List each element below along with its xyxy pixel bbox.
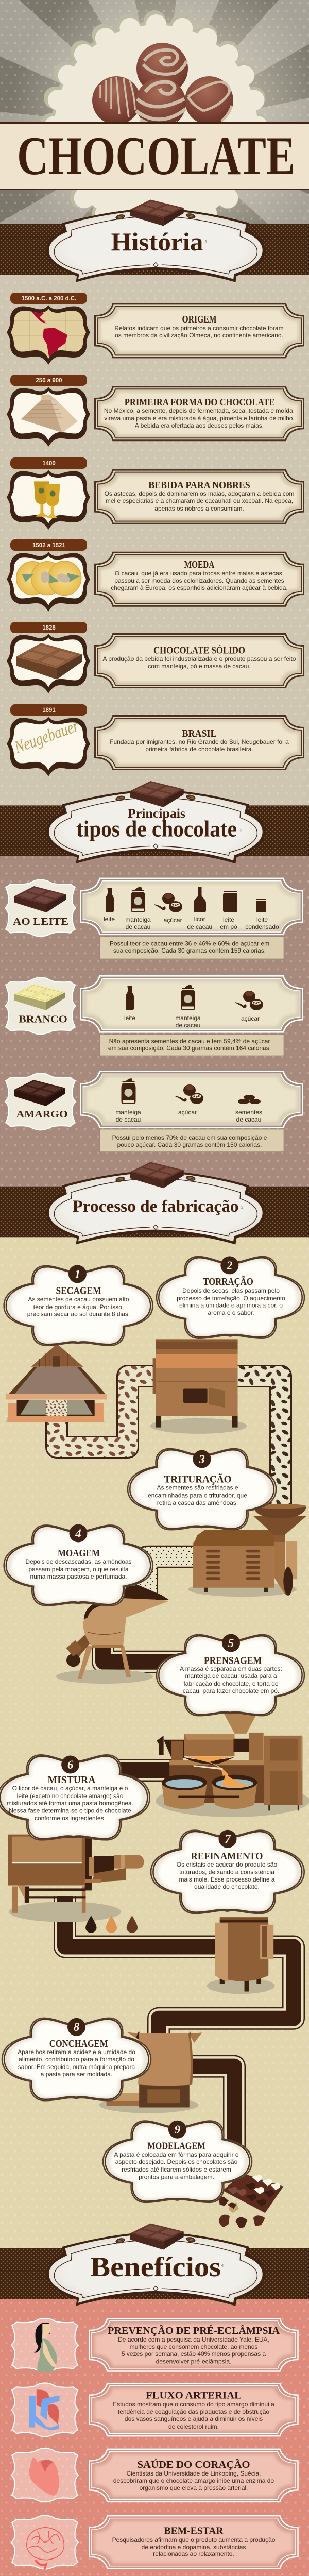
- timeline row: brasil: Neugebauer: [11, 716, 81, 757]
- step 2: torração: TORRAÇÃO: [203, 1276, 253, 1287]
- type: ao leite: de cacau: [126, 923, 150, 930]
- timeline row: bebida para nobres: [7, 457, 304, 530]
- timeline row: moeda: [7, 539, 304, 612]
- step 8: conchagem: a pasta para ser moldada.: [41, 2071, 112, 2078]
- step 4: moagem: Depois de descascadas, as amêndoas: [25, 1558, 132, 1565]
- machine: crusher: [188, 1504, 306, 1597]
- type: branco: manteiga: [175, 1014, 201, 1022]
- timeline row: moeda: chegaram à Europa, os espanhóis adicionaram açúcar à bebida.: [111, 584, 288, 591]
- type: ao leite: [5, 878, 302, 959]
- step 5: prensagem: PRENSAGEM: [204, 1655, 262, 1666]
- paste drops: [85, 1916, 138, 1933]
- step 6: mistura: misturados até formar uma pasta homogênea.: [7, 1800, 133, 1807]
- timeline row: primeira forma: [7, 375, 304, 447]
- step 8: conchagem: sabor. Em seguida, outra máquina prepara: [18, 2063, 135, 2071]
- pipe: dried beans to roaster: [57, 1376, 157, 1447]
- heading: Benefícios: Benefícios: [90, 2251, 221, 2282]
- step 5: prensagem: manteiga de cacau, usada para a: [185, 1672, 277, 1680]
- pipe: mixer to refiner to conching: [65, 1896, 294, 2045]
- section background: history: [0, 275, 309, 806]
- machine: mixer: [8, 1835, 144, 1922]
- heading: Principais tipos de chocolate: [0, 781, 309, 863]
- timeline row: brasil: Fundada por imigrantes, no Rio Grande do Sul, Neugebauer foi a: [110, 738, 289, 745]
- benefit: bem-estar: de endorfina e dopamina, substâncias: [142, 2544, 246, 2551]
- type: branco: açúcar: [241, 1015, 260, 1022]
- timeline row: bebida para nobres: apenas os nobres a consumiam.: [154, 505, 244, 512]
- panel: types of chocolate: [5, 878, 302, 1152]
- step 7: refinamento: REFINAMENTO: [191, 1851, 263, 1862]
- step 9: modelagem: resfriados até ficarem sólidos e estarem: [122, 2166, 231, 2173]
- step 7: refinamento: triturados, deixando a consistência: [179, 1869, 274, 1876]
- step 7: refinamento: qualidade do chocolate.: [194, 1883, 260, 1890]
- timeline row: bebida para nobres: Os astecas, depois de dominarem os maias, adoçaram a bebida com: [105, 490, 294, 497]
- hero background: [0, 0, 309, 224]
- timeline row: bebida para nobres: BEBIDA PARA NOBRES: [148, 480, 250, 491]
- step 6: mistura: conforme os ingredientes.: [35, 1815, 106, 1822]
- machine: mill: [56, 1585, 169, 1684]
- step 5: prensagem: fabricação do chocolate, e torta de: [183, 1680, 279, 1687]
- benefit: pré-eclâmpsia: PREVENÇÃO DE PRÉ-ECLÂMPSIA: [108, 2324, 280, 2336]
- type: ao leite: leite: [104, 916, 115, 923]
- heading: Principais tipos de chocolate: 2: [240, 828, 243, 833]
- benefit: saúde do coração: organismo que eleva a pressão arterial.: [140, 2484, 248, 2492]
- step 1: secagem: [4, 1265, 153, 1346]
- heading: Processo de fabricação: [0, 1162, 309, 1244]
- step 3: trituração: As sementes são resfriadas e: [157, 1484, 238, 1492]
- timeline row: primeira forma: No México, a semente, depois de fermentada, seca, tostada e moída,: [104, 407, 295, 414]
- benefit: pré-eclâmpsia: [11, 2318, 298, 2372]
- step 2: torração: 2: [226, 1259, 233, 1272]
- section background: types: [0, 856, 309, 1187]
- timeline row: origem: 1500 a.C. a 200 d.C.: [22, 296, 76, 302]
- benefit: fluxo arterial: de colesterol ruim.: [168, 2423, 219, 2430]
- timeline row: brasil: BRASIL: [182, 728, 216, 739]
- heading: Processo de fabricação: Processo de fabricação: [72, 1197, 239, 1216]
- step 9: modelagem: aspecto desejado. Depois os chocolates são: [115, 2158, 238, 2165]
- type: ao leite: sua composição. Cada 30 gramas contém 159 calorias.: [113, 947, 266, 954]
- section background: process: [0, 1237, 309, 2248]
- timeline row: brasil: primeira fábrica de chocolate brasileira.: [145, 745, 253, 753]
- step 1: secagem: teor de gordura e água. Por isso,: [33, 1303, 124, 1311]
- step 4: moagem: numa massa pastosa e perfumada.: [30, 1573, 127, 1580]
- timeline row: moeda: MOEDA: [184, 559, 215, 570]
- benefit: saúde do coração: [11, 2448, 298, 2502]
- type: branco: em sua composição. Cada 30 gramas contém 164 calorias.: [108, 1045, 271, 1052]
- type: branco: [5, 976, 302, 1056]
- benefit: fluxo arterial: FLUXO ARTERIAL: [146, 2389, 242, 2401]
- pipe: paste mill to press: [103, 1643, 206, 1662]
- pipe: conching to molding: [191, 2066, 234, 2148]
- type: branco: Não apresenta sementes de cacau e tem 59,4% de açúcar: [109, 1038, 270, 1045]
- benefit: fluxo arterial: dos vasos sanguíneos e ajuda a diminuir os níveis: [125, 2415, 263, 2422]
- timeline row: moeda: 1502 a 1521: [32, 543, 66, 549]
- panel: manufacturing process: [0, 1256, 309, 2228]
- type: amargo: AMARGO: [16, 1109, 68, 1120]
- step 6: mistura: O licor de cacau, o açúcar, a manteiga e o: [12, 1785, 128, 1792]
- timeline row: primeira forma: virava uma pasta e era misturada à água, pimenta e farinha de milho.: [104, 415, 295, 422]
- step 8: conchagem: [2, 2018, 151, 2100]
- type: amargo: [5, 1072, 302, 1152]
- step 8: conchagem: 8: [74, 2021, 80, 2033]
- benefit: pré-eclâmpsia: desenvolver pré-eclâmpsia.: [156, 2358, 231, 2365]
- step 9: modelagem: A pasta é colocada em fôrmas para adquirir o: [114, 2151, 239, 2158]
- step 4: moagem: passam pela moagem, o que resulta: [28, 1566, 129, 1573]
- truffle front: [135, 78, 186, 128]
- heading: Processo de fabricação: 3: [241, 1205, 244, 1210]
- step 5: prensagem: [157, 1634, 304, 1716]
- type: ao leite: licor: [194, 916, 205, 923]
- step 6: mistura: leite (exceto no chocolate amargo) são: [17, 1792, 124, 1800]
- step 2: torração: Depois de secas, elas passam pelo: [182, 1287, 280, 1294]
- panel: benefits: [11, 2318, 298, 2576]
- timeline row: bebida para nobres: mel e especiarias e a chamaram de cacauhatl ou xocoatl. Na época,: [106, 497, 293, 504]
- molds and chocolates: [219, 2173, 283, 2228]
- benefit: bem-estar: BEM-ESTAR: [164, 2526, 224, 2537]
- step 4: moagem: MOAGEM: [58, 1548, 100, 1559]
- step 5: prensagem: A massa é separada em duas partes:: [180, 1665, 282, 1672]
- benefit: bem-estar: Pesquisadores afirmam que o produto aumenta a produção: [112, 2536, 276, 2544]
- heading: História: História: [111, 227, 203, 256]
- type: ao leite: AO LEITE: [13, 916, 68, 927]
- benefit: saúde do coração: SAÚDE DO CORAÇÃO: [137, 2458, 250, 2470]
- heading: Benefícios: 4: [221, 2263, 224, 2268]
- step 6: mistura: Nessa fase determina-se o tipo de chocolate: [9, 1807, 131, 1814]
- step 6: mistura: MISTURA: [47, 1774, 96, 1786]
- timeline row: origem: Relatos indicam que os primeiros a consumir chocolate foram: [114, 325, 284, 332]
- heading: Benefícios: [0, 2224, 309, 2306]
- timeline row: origem: ORIGEM: [182, 314, 217, 325]
- type: ao leite: açúcar: [164, 917, 182, 924]
- type: branco: BRANCO: [19, 1014, 67, 1025]
- step 3: trituração: [128, 1449, 276, 1530]
- step 2: torração: aroma e o sabor.: [208, 1309, 254, 1316]
- pipe: press to mixer: [103, 1759, 178, 1782]
- step 2: torração: elimina a umidade e aprimora a cor, o: [179, 1302, 283, 1309]
- title band: [0, 122, 309, 190]
- type: amargo: manteiga: [115, 1109, 141, 1116]
- section background: benefits: [0, 2298, 309, 2576]
- step 8: conchagem: CONCHAGEM: [49, 2038, 108, 2049]
- type: branco: de cacau: [176, 1022, 200, 1029]
- timeline row: origem: [7, 293, 304, 365]
- timeline row: primeira forma: 250 a 900: [36, 378, 62, 384]
- timeline row: brasil: 1891: [42, 707, 56, 714]
- type: amargo: sementes: [235, 1109, 262, 1116]
- machine: roaster: [150, 1339, 247, 1434]
- machine: refiner: [207, 1917, 274, 1994]
- type: ao leite: manteiga: [125, 916, 151, 923]
- step 1: secagem: 1: [75, 1268, 80, 1281]
- truffles illustration: [92, 43, 233, 128]
- step 1: secagem: SECAGEM: [56, 1285, 101, 1297]
- timeline row: primeira forma: PRIMEIRA FORMA DO CHOCOLATE: [125, 397, 275, 408]
- step 9: modelagem: 9: [175, 2123, 181, 2136]
- machine: press: [156, 1711, 309, 1817]
- type: ao leite: leite: [223, 916, 234, 923]
- scalloped cream medallion: [52, 22, 258, 228]
- type: amargo: Possui pelo menos 70% de cacau em sua composição e: [112, 1134, 267, 1141]
- type: ao leite: Possui teor de cacau entre 36 e 46% e 60% de açúcar em: [110, 940, 269, 947]
- step 7: refinamento: Os cristais de açúcar do produto são: [177, 1861, 278, 1868]
- pipe: roasted beans to crusher: [232, 1376, 281, 1512]
- step 3: trituração: TRITURAÇÃO: [164, 1473, 232, 1485]
- timeline row: chocolate sólido: A produção da bebida foi industrializada e o produto passou a ser feito: [103, 655, 296, 663]
- step 9: modelagem: prontos para a embalagem.: [139, 2173, 214, 2180]
- benefit: fluxo arterial: Estudos mostram que o consumo do tipo amargo diminui a: [113, 2401, 274, 2408]
- benefit: pré-eclâmpsia: 5 vezes por semana, estão 40% menos propensas a: [122, 2350, 266, 2358]
- benefit: pré-eclâmpsia: mulheres que consomem chocolate, ao menos: [130, 2343, 258, 2350]
- benefit: fluxo arterial: [11, 2383, 298, 2437]
- step 2: torração: [157, 1256, 304, 1338]
- timeline row: primeira forma: A bebida era ofertada aos deuses pelos maias.: [135, 422, 264, 429]
- type: ao leite: de cacau: [187, 923, 212, 930]
- step 1: secagem: As sementes de cacau possuem alto: [28, 1296, 129, 1303]
- step 4: moagem: 4: [75, 1527, 81, 1540]
- heading: História: [0, 200, 309, 282]
- step 7: refinamento: [151, 1830, 304, 1913]
- step 9: modelagem: [103, 2121, 252, 2202]
- step 8: conchagem: alimento, contribuindo para a formação do: [19, 2056, 134, 2063]
- benefit: bem-estar: [11, 2516, 298, 2570]
- step 7: refinamento: mais mole. Esse processo define a: [179, 1876, 275, 1883]
- type: ao leite: em pó: [220, 923, 237, 930]
- step 3: trituração: retira a casca das amêndoas.: [157, 1499, 238, 1506]
- step 5: prensagem: cacau, para fazer chocolate em pó.: [183, 1687, 279, 1694]
- type: ao leite: condensado: [245, 923, 279, 930]
- panel: history timeline: [7, 293, 304, 776]
- benefit: bem-estar: relacionadas ao relaxamento.: [153, 2550, 234, 2557]
- pipe: nibs to mill: [147, 1557, 196, 1600]
- type: amargo: de cacau: [236, 1116, 261, 1123]
- machine: drying hut: [6, 1344, 107, 1422]
- benefit: saúde do coração: Cientistas da Universidade de Linkoping, Suécia,: [127, 2470, 261, 2477]
- step 9: modelagem: MODELAGEM: [147, 2140, 205, 2151]
- step 6: mistura: 6: [67, 1758, 74, 1771]
- truffle back: [136, 43, 188, 94]
- type: amargo: pouco açúcar. Cada 30 gramas contém 150 calorias.: [117, 1141, 262, 1148]
- truffle right: [185, 76, 233, 125]
- heading: Principais tipos de chocolate: Principais: [128, 807, 185, 821]
- timeline row: brasil: [7, 704, 304, 776]
- heading: História: 1: [205, 240, 208, 244]
- machine: conching: [99, 2030, 202, 2113]
- timeline row: moeda: passou a ser moeda dos colonizadores. Quando as sementes: [114, 577, 284, 584]
- step 8: conchagem: Aparelhos retiram a acidez e a umidade do: [18, 2048, 135, 2056]
- timeline row: origem: os membros da civilização Olmeca, no continente americano.: [115, 332, 283, 339]
- timeline row: bebida para nobres: 1400: [42, 461, 56, 467]
- timeline row: chocolate sólido: com manteiga, pó e massa de cacau.: [148, 663, 251, 670]
- step 3: trituração: encaminhadas para o triturador, que: [148, 1492, 247, 1499]
- truffle left: [92, 76, 141, 125]
- type: branco: leite: [124, 1014, 135, 1022]
- step 6: mistura: [0, 1755, 150, 1840]
- step 3: trituração: 3: [198, 1453, 205, 1466]
- heading: Principais tipos de chocolate: tipos de chocolate: [76, 816, 237, 842]
- type: amargo: de cacau: [116, 1116, 141, 1123]
- step 1: secagem: precisam secar ao sol durante 8 dias.: [27, 1311, 130, 1318]
- timeline row: chocolate sólido: 1828: [42, 625, 56, 631]
- step 7: refinamento: 7: [225, 1833, 231, 1845]
- step 2: torração: processo de torrefação. O aquecimento: [177, 1295, 285, 1302]
- benefit: saúde do coração: descobriram que o chocolate amargo inibe uma enzima do: [113, 2477, 274, 2484]
- benefit: fluxo arterial: tendência de coagulação das plaquetas e de obstrução: [118, 2408, 269, 2415]
- type: ao leite: leite: [256, 916, 268, 923]
- benefit: pré-eclâmpsia: De acordo com a pesquisa da Universidade Yale, EUA,: [118, 2336, 269, 2343]
- timeline row: moeda: O cacau, que já era usado para trocas entre maias e astecas,: [115, 570, 284, 577]
- step 5: prensagem: 5: [228, 1637, 234, 1650]
- timeline row: chocolate sólido: [7, 622, 304, 693]
- timeline row: chocolate sólido: CHOCOLATE SÓLIDO: [153, 644, 245, 656]
- step 4: moagem: [4, 1524, 153, 1605]
- type: amargo: açúcar: [178, 1109, 197, 1116]
